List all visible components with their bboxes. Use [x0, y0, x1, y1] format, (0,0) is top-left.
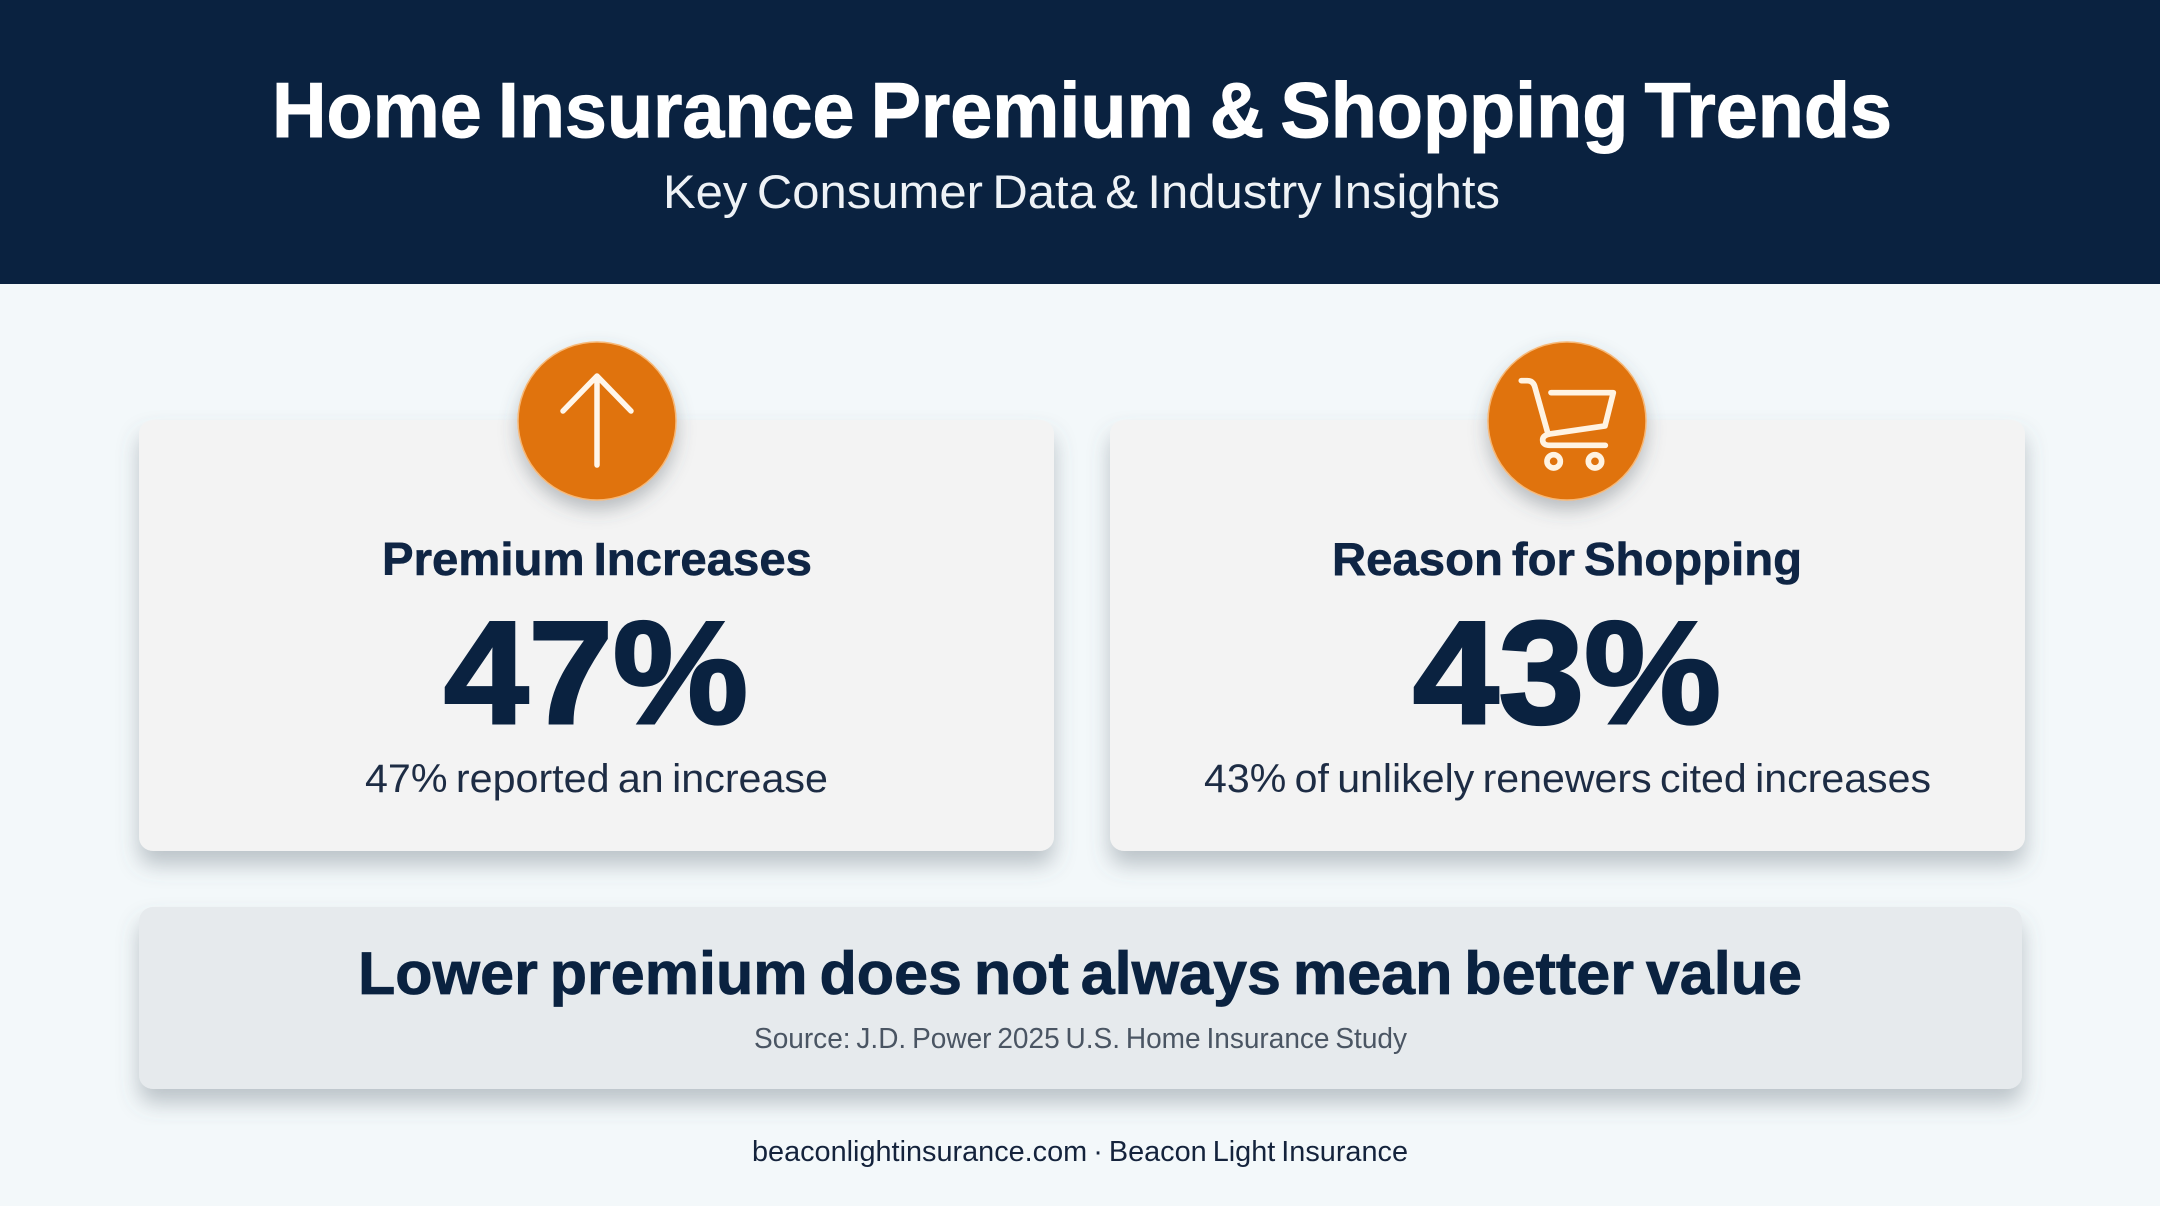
header band	[0, 0, 2160, 284]
callout banner	[139, 907, 2022, 1089]
heading: premium increases: Premium Increases	[382, 533, 812, 585]
stat: 47%: 47%	[444, 591, 748, 754]
icon: up arrow	[518, 342, 676, 500]
heading: reason for shopping: Reason for Shopping	[1332, 533, 1802, 585]
description: 43% of unlikely renewers: 43% of unlikely renewers cited increases	[1204, 757, 1931, 801]
description: 47% reported: 47% reported an increase	[365, 757, 828, 801]
subtitle: Key Consumer Data & Industry Insights	[663, 165, 1500, 218]
source line: Source: J.D. Power 2025 U.S. Home Insurance Study	[754, 1023, 1407, 1055]
panel: reason for shopping	[1110, 342, 2025, 851]
stat: 43%: 43%	[1413, 591, 1721, 754]
title: Home Insurance Premium & Shopping Trends	[272, 66, 1892, 154]
footer: beaconlightinsurance.com · Beacon Light Insurance	[752, 1136, 1408, 1168]
callout headline: Lower premium does not always mean better value	[358, 940, 1802, 1007]
panel: premium increases	[139, 342, 1054, 851]
icon: shopping cart	[1488, 342, 1646, 500]
